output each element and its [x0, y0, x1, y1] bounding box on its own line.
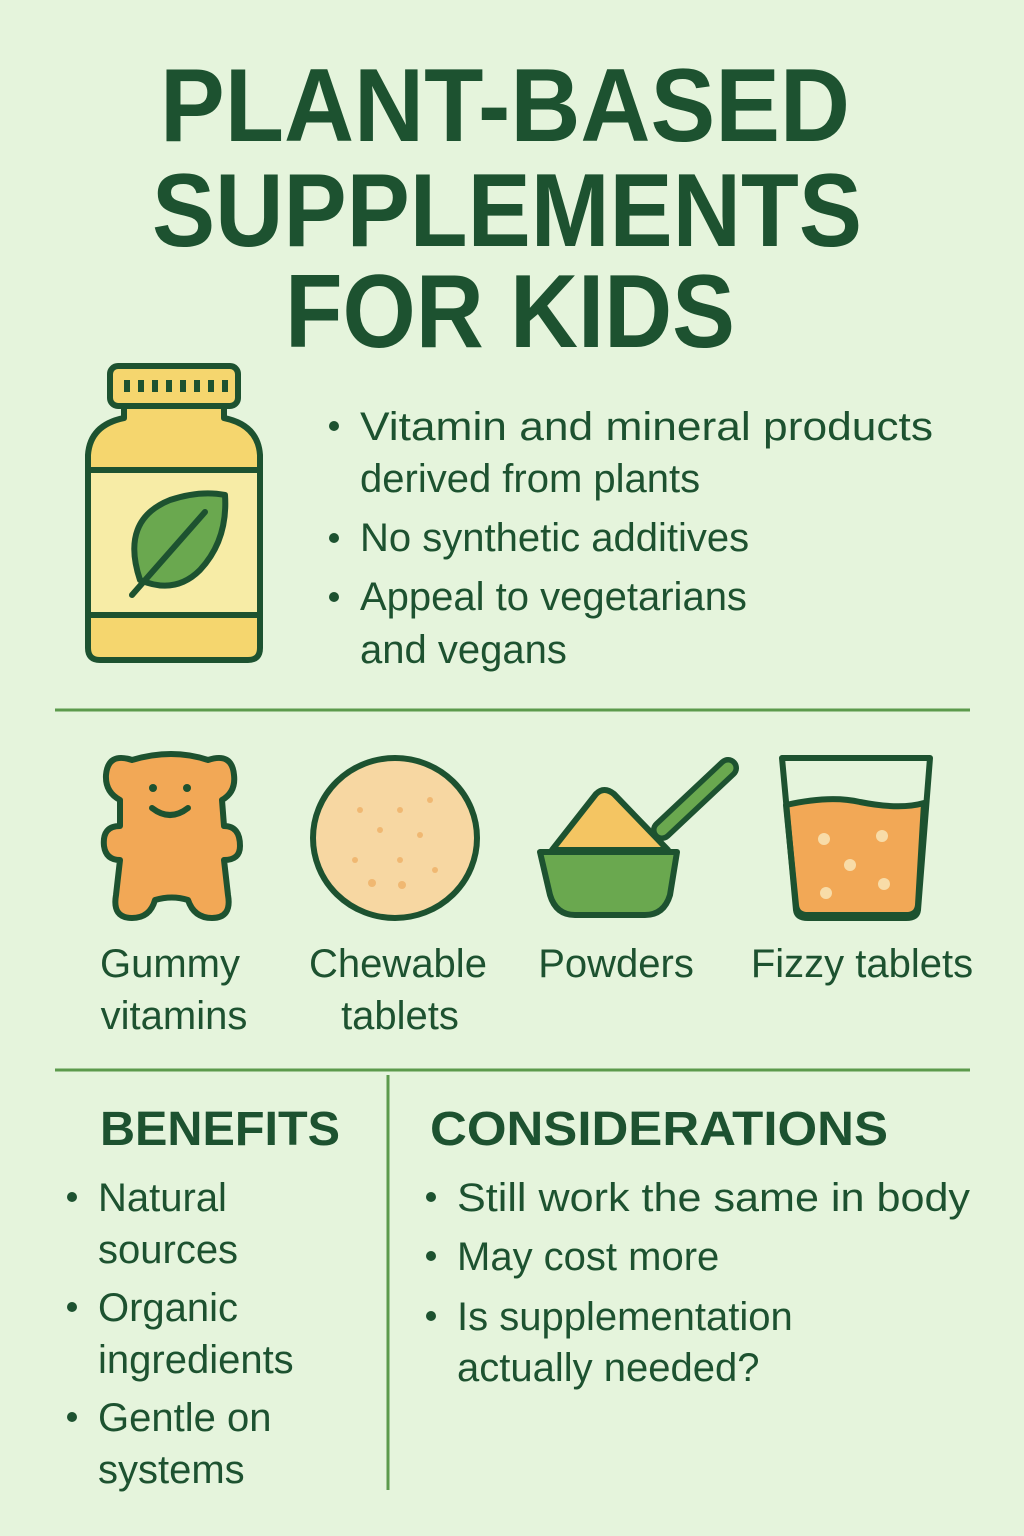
- icon: gummy bear: [104, 754, 240, 918]
- icon: chewable tablet: [313, 758, 477, 918]
- panel: benefits: Gentle on: [98, 1396, 271, 1440]
- title: SUPPLEMENTS: [152, 153, 862, 269]
- labels: formats: Fizzy tablets: [751, 942, 973, 986]
- panel: considerations: [426, 1103, 970, 1390]
- panel: benefits: [67, 1103, 340, 1492]
- icon: powder scoop: [540, 768, 728, 915]
- labels: formats: Gummy: [100, 942, 240, 986]
- panel: considerations: May cost more: [457, 1235, 719, 1279]
- panel: considerations: CONSIDERATIONS: [430, 1103, 888, 1156]
- panel: benefits: Organic: [98, 1286, 238, 1330]
- panel: benefits: ingredients: [98, 1338, 294, 1382]
- title: PLANT-BASED: [160, 48, 850, 164]
- icon: supplement bottle: [88, 366, 260, 660]
- panel: considerations: actually needed?: [457, 1346, 759, 1390]
- title: FOR KIDS: [285, 254, 735, 370]
- bullets: intro: derived from plants: [360, 457, 700, 501]
- panel: considerations: Still work the same in body: [457, 1176, 970, 1220]
- labels: formats: vitamins: [101, 994, 247, 1038]
- panel: benefits: sources: [98, 1228, 238, 1272]
- labels: formats: Chewable: [309, 942, 487, 986]
- panel: benefits: Natural: [98, 1176, 227, 1220]
- bullets: intro: and vegans: [360, 628, 567, 672]
- title: [152, 48, 862, 370]
- icon: fizzy drink glass: [782, 758, 930, 918]
- panel: considerations: Is supplementation: [457, 1295, 793, 1339]
- bullets: intro: No synthetic additives: [360, 516, 749, 560]
- bullets: intro: Vitamin and mineral products: [360, 405, 933, 449]
- labels: formats: Powders: [538, 942, 694, 986]
- labels: formats: tablets: [341, 994, 459, 1038]
- labels: formats: [100, 942, 973, 1038]
- bullets: intro: [329, 405, 933, 672]
- bullets: intro: Appeal to vegetarians: [360, 575, 747, 619]
- panel: benefits: systems: [98, 1448, 245, 1492]
- panel: benefits: BENEFITS: [100, 1103, 340, 1156]
